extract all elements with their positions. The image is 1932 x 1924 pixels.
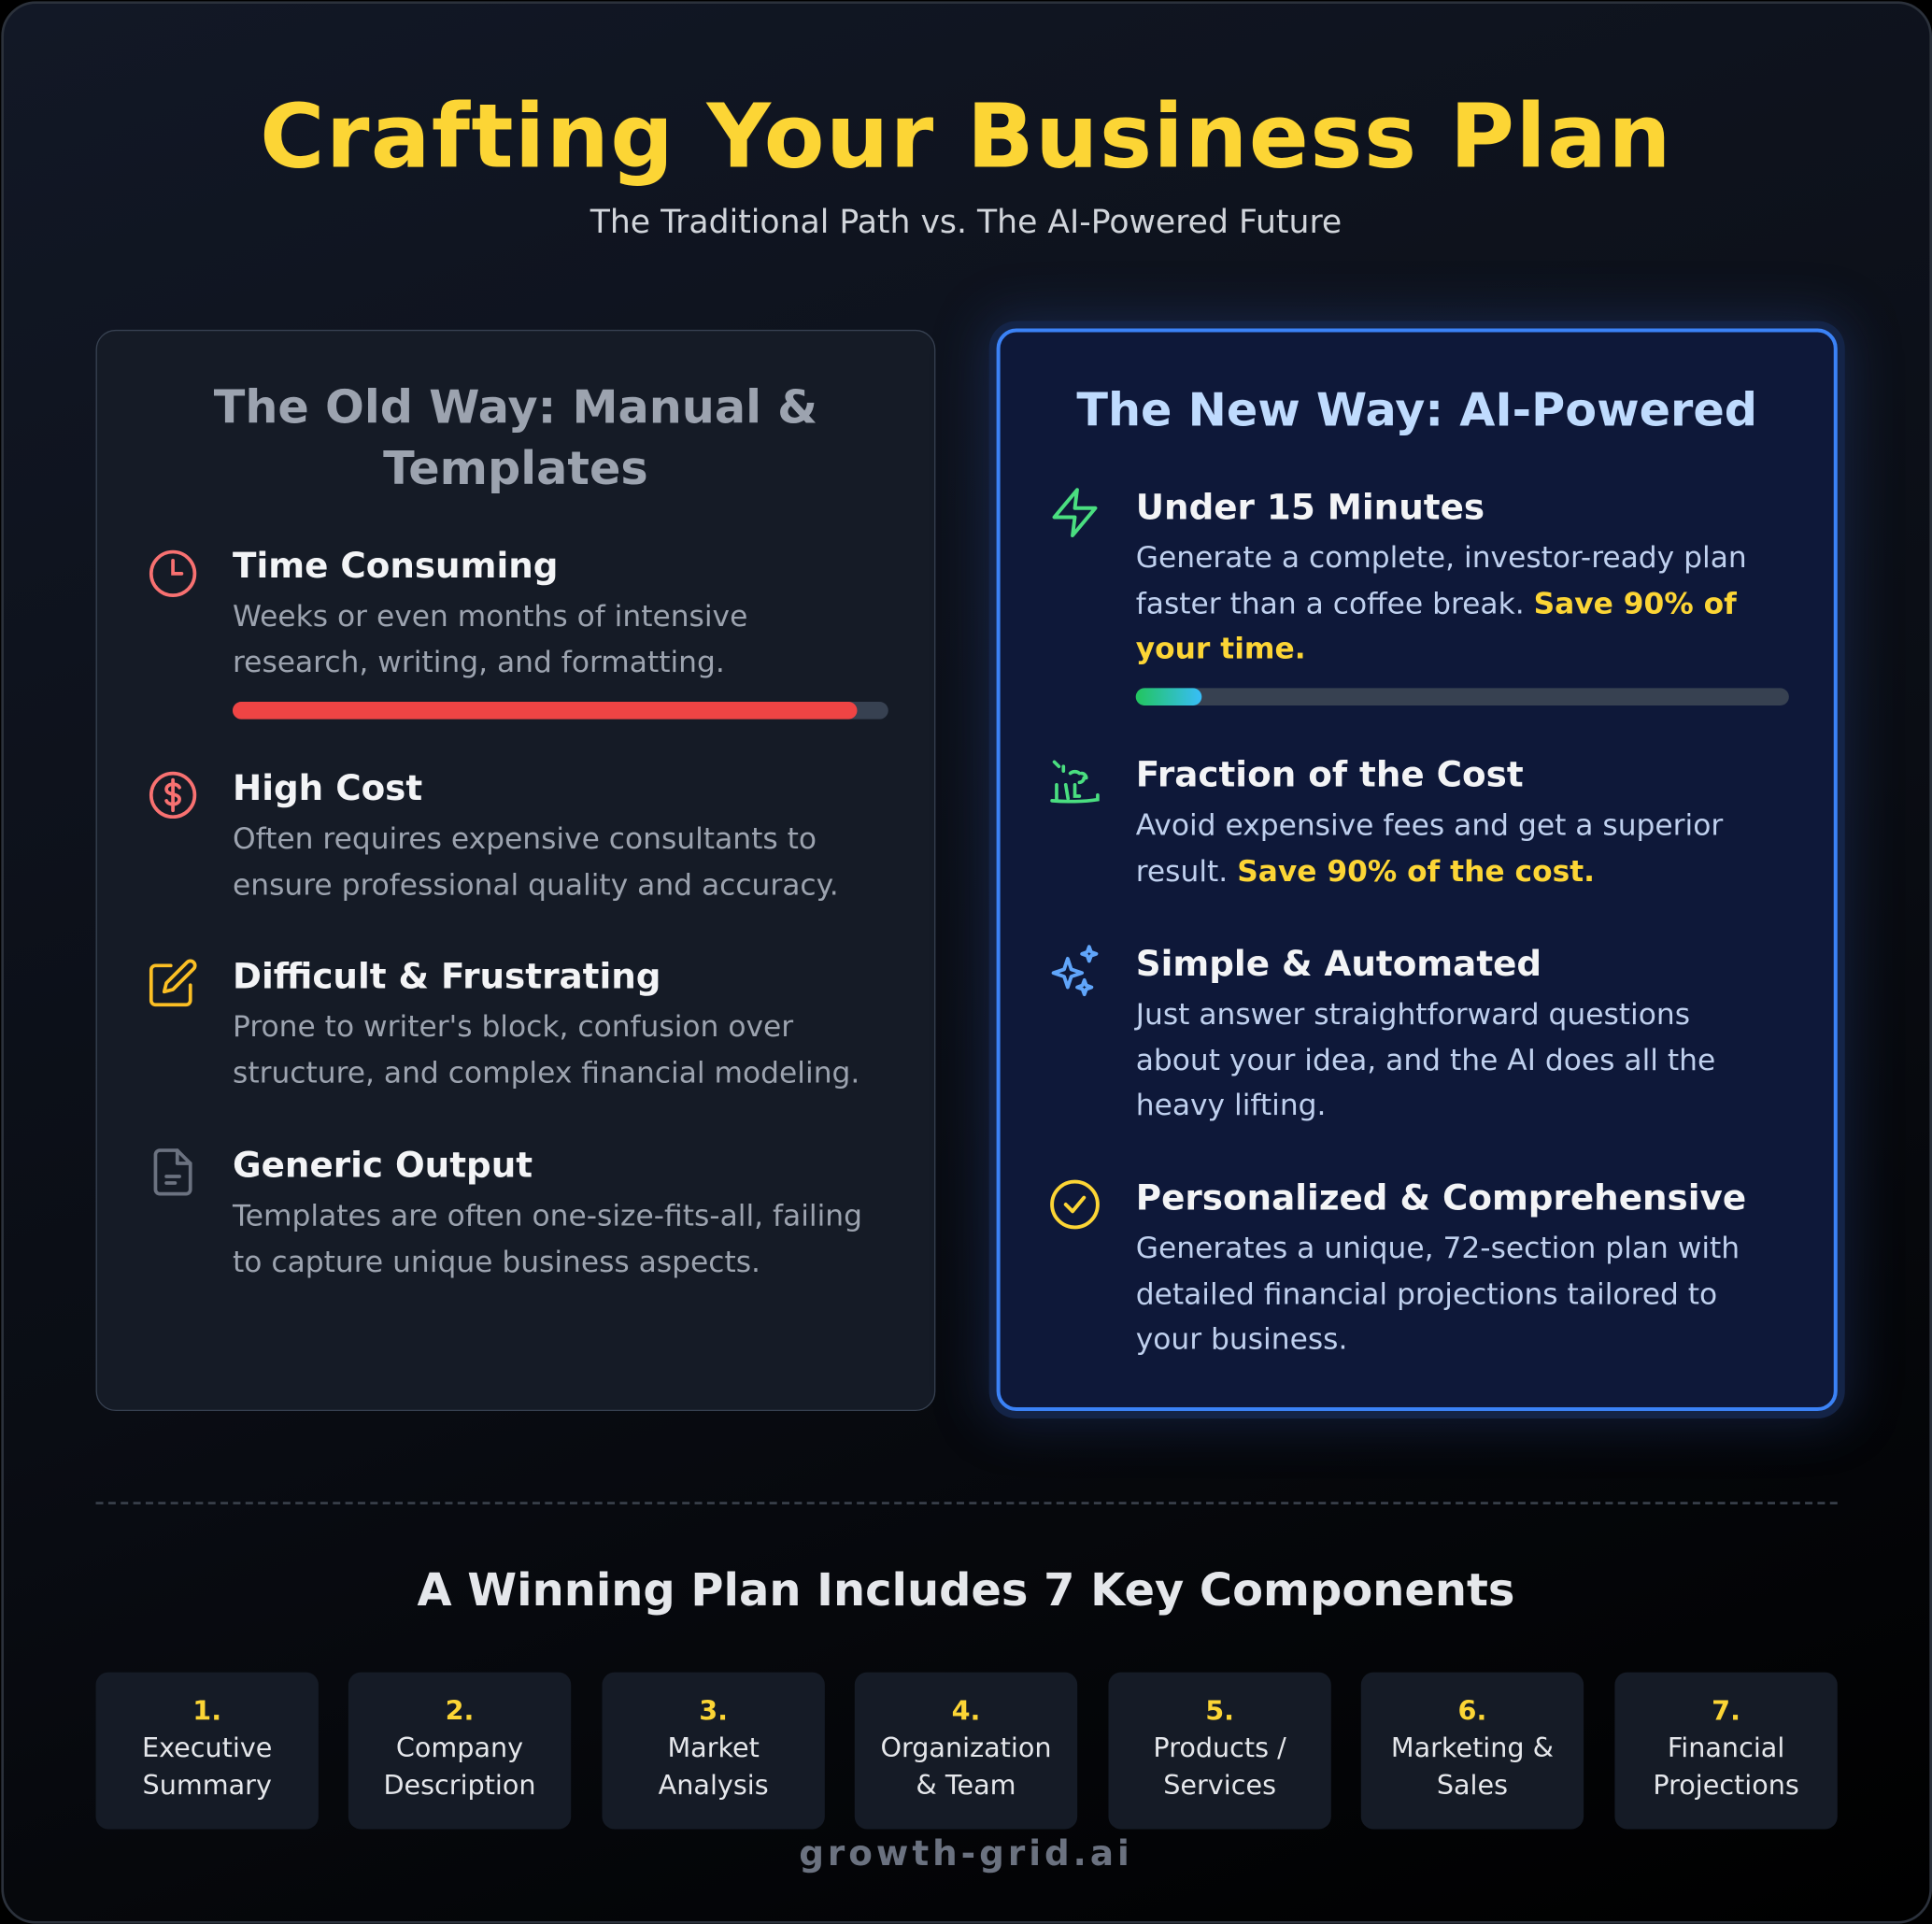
icon: check circle	[1050, 1179, 1100, 1230]
new way heading: The New Way: AI-Powered	[1076, 383, 1757, 436]
component 7: Financial	[1668, 1733, 1784, 1764]
item: time consuming: Weeks or even months of intensive research, writing, and formatting.	[233, 598, 747, 678]
old way heading	[214, 380, 817, 495]
item: fraction of cost	[1136, 754, 1723, 888]
component 1: 1.	[192, 1696, 221, 1727]
item: difficult: Difficult & Frustrating	[233, 956, 661, 997]
component 4: Organization	[880, 1733, 1051, 1764]
item: simple: Simple & Automated	[1136, 943, 1541, 984]
item: under 15 minutes: Under 15 Minutes	[1136, 487, 1485, 528]
component 6: Marketing &	[1391, 1733, 1554, 1764]
item: difficult	[233, 956, 859, 1090]
component 3: 3.	[699, 1696, 728, 1727]
icon: document	[153, 1148, 192, 1196]
item: under 15 minutes: Generate a complete, investor-ready plan faster than a coffee break. Save 90% of your time.	[1136, 540, 1747, 665]
item: time consuming	[233, 545, 747, 678]
component 1: Summary	[143, 1771, 272, 1802]
component 2: 2.	[446, 1696, 474, 1727]
component 1: Executive	[142, 1733, 272, 1764]
item: simple: Just answer straightforward questions about your idea, and the AI does all the heavy lifting.	[1136, 997, 1715, 1122]
item: generic	[232, 1145, 862, 1278]
item: simple	[1134, 943, 1715, 1122]
icon: cost	[1050, 761, 1100, 804]
item: personalized: Personalized & Comprehensive	[1136, 1177, 1746, 1219]
component 4	[855, 1673, 1077, 1829]
components heading: A Winning Plan Includes 7 Key Components	[418, 1565, 1514, 1617]
component 7	[1614, 1673, 1838, 1829]
component 2	[348, 1673, 571, 1829]
title: Crafting Your Business Plan	[260, 85, 1672, 188]
icon: clock	[149, 549, 196, 597]
item: high cost: Often requires expensive consultants to ensure professional quality and accuracy.	[233, 821, 839, 902]
item: high cost: High Cost	[233, 768, 422, 809]
item: generic: Generic Output	[233, 1145, 533, 1186]
component 5: Services	[1163, 1771, 1276, 1802]
component 4: & Team	[916, 1771, 1016, 1802]
old way heading: Templates	[383, 442, 648, 495]
component 3	[602, 1673, 825, 1829]
component 5: Products /	[1153, 1733, 1286, 1764]
item: difficult: Prone to writer's block, confusion over structure, and complex financial modeling.	[233, 1009, 859, 1090]
component 6: 6.	[1458, 1696, 1486, 1727]
panel: old way	[96, 330, 935, 1411]
component 2: Company	[396, 1733, 523, 1764]
component 3: Market	[667, 1733, 760, 1764]
old way heading: The Old Way: Manual &	[214, 380, 817, 435]
component 5	[1108, 1673, 1331, 1829]
component 6	[1361, 1673, 1584, 1829]
component 1	[96, 1673, 319, 1829]
components row	[95, 1673, 1838, 1830]
item: personalized: Generates a unique, 72-section plan with detailed financial projections tailored to your business.	[1136, 1231, 1740, 1356]
item: generic: Templates are often one-size-fits-all, failing to capture unique business aspects.	[233, 1198, 862, 1278]
progress bar: green	[1136, 688, 1789, 705]
footer brand: growth-grid.ai	[799, 1832, 1133, 1874]
progress bar: red	[233, 702, 888, 720]
panel: new way	[997, 329, 1838, 1411]
item: high cost	[233, 768, 839, 902]
item: fraction of cost: Fraction of the Cost	[1136, 754, 1524, 795]
item: time consuming: Time Consuming	[233, 545, 558, 586]
item: fraction of cost: Avoid expensive fees and get a superior result. Save 90% of the cost.	[1136, 807, 1723, 888]
component 3: Analysis	[659, 1771, 769, 1802]
component 5: 5.	[1205, 1696, 1234, 1727]
item: personalized	[1136, 1177, 1746, 1356]
icon: dollar	[149, 772, 196, 819]
component 6: Sales	[1437, 1771, 1508, 1802]
icon: lightning	[1052, 488, 1097, 537]
icon: pencil	[149, 959, 197, 1007]
component 7: 7.	[1712, 1696, 1740, 1727]
component 2: Description	[383, 1771, 536, 1802]
component 7: Projections	[1653, 1771, 1799, 1802]
subtitle: The Traditional Path vs. The AI-Powered Future	[590, 204, 1342, 241]
icon: sparkles	[1052, 945, 1099, 996]
component 4: 4.	[952, 1696, 980, 1727]
